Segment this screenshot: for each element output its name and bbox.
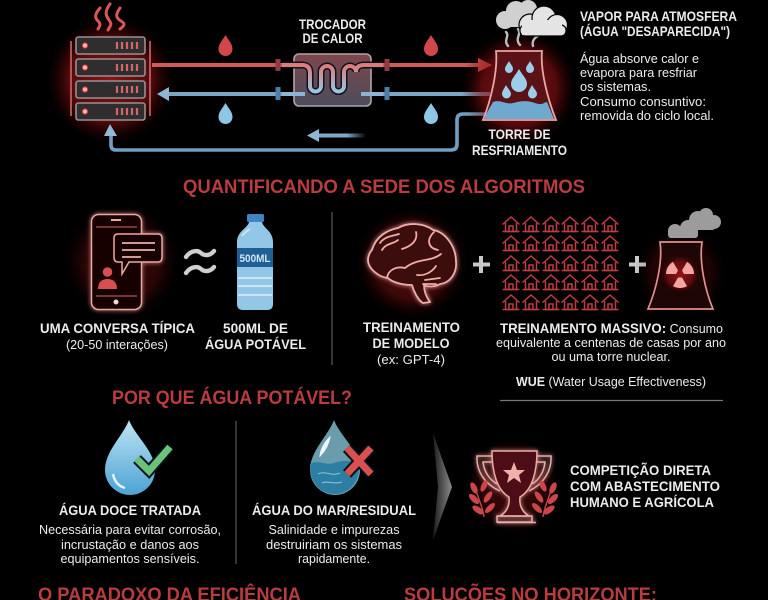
icon: red water drops [218, 35, 438, 56]
plus [473, 256, 490, 273]
label: sea water: ÁGUA DO MAR/RESIDUAL [252, 502, 416, 518]
arrow: chevron [433, 433, 452, 540]
panel: one conversation [40, 204, 306, 352]
text block: vapour to atmosphere: Água absorve calor e [580, 51, 699, 66]
hot water pipe [152, 58, 492, 72]
label: heat exchanger: DE CALOR [302, 30, 362, 46]
text block: sea water: rapidamente. [298, 551, 370, 566]
text block: treated water: incrustação e danos aos [61, 537, 199, 552]
text block: competition [570, 461, 720, 510]
icon: drop with check [105, 420, 170, 495]
label: cooling tower [472, 126, 567, 158]
icon: cooling tower [461, 30, 577, 146]
text block: treated water: equipamentos sensíveis. [60, 551, 200, 566]
panel: treated fresh water [39, 420, 221, 566]
panel: direct competition [465, 438, 720, 534]
text block: massive training [496, 320, 726, 364]
label: typical conversation: (20-50 interações) [66, 337, 168, 352]
panel: sea water [252, 420, 416, 566]
heading: why potable water: POR QUE ÁGUA POTÁVEL? [112, 386, 352, 409]
approx symbol [186, 251, 214, 273]
icon: water bottle: 500ML [240, 253, 271, 265]
text block: competition: COM ABASTECIMENTO [570, 478, 720, 494]
text block: massive training: TREINAMENTO MASSIVO: Consumo [500, 320, 723, 336]
label: 500 ml: ÁGUA POTÁVEL [205, 336, 306, 352]
icon: houses grid [502, 217, 618, 310]
text block: vapour to atmosphere: evapora para resfriar [580, 65, 698, 80]
icon: vapour clouds [496, 0, 568, 46]
label: treated water: ÁGUA DOCE TRATADA [59, 502, 201, 518]
text block: vapour to atmosphere: (ÁGUA "DESAPARECIDA") [580, 23, 730, 39]
icon: nuclear tower [635, 208, 727, 318]
text block: treated water: Necessária para evitar corrosão, [39, 522, 221, 537]
text block: sea water [266, 522, 402, 566]
text block: vapour to atmosphere: removida do ciclo local. [580, 108, 714, 123]
icon: phone with chat [64, 204, 180, 320]
label: 500 ml: 500ML DE [223, 320, 288, 336]
icon: blue water drops [218, 103, 438, 124]
heading: quantifying: QUANTIFICANDO A SEDE DOS ALGORITMOS [183, 176, 585, 198]
panel: model training [356, 207, 727, 400]
text block: massive training: equivalente a centenas de casas por ano [496, 335, 726, 350]
plus [629, 256, 646, 273]
heat exchanger [282, 54, 383, 106]
label: typical conversation: UMA CONVERSA TÍPICA [40, 320, 195, 336]
return pipe [104, 114, 490, 150]
label: model training: (ex: GPT-4) [377, 352, 445, 367]
text block: competition: HUMANO E AGRÍCOLA [570, 494, 714, 510]
text block: vapour to atmosphere: Consumo consuntivo: [580, 94, 706, 109]
panel: cooling cycle diagram [46, 0, 577, 158]
label: heat exchanger [299, 16, 366, 46]
text block: competition: COMPETIÇÃO DIRETA [570, 461, 711, 478]
text block: vapour to atmosphere: VAPOR PARA ATMOSFERA [580, 8, 737, 24]
text block: treated water [39, 522, 221, 566]
icon: drop with cross [310, 420, 371, 495]
label: model training: TREINAMENTO [363, 319, 460, 335]
label: cooling tower: RESFRIAMENTO [472, 142, 567, 158]
label: 500 ml [205, 320, 306, 352]
label: model training: DE MODELO [372, 335, 450, 351]
text: WUE: WUE (Water Usage Effectiveness) [516, 374, 706, 389]
text block: massive training: ou uma torre nuclear. [552, 349, 670, 364]
text block: vapour to atmosphere [580, 8, 737, 123]
text block: sea water: destruiriam os sistemas [266, 537, 402, 552]
label: typical conversation [40, 320, 195, 352]
text block: vapour to atmosphere: os sistemas. [580, 79, 651, 94]
text block: sea water: Salinidade e impurezas [268, 522, 400, 537]
icon: trophy [465, 438, 561, 534]
label: model training [363, 319, 460, 367]
icon: heated server rack [46, 4, 174, 144]
icon: water bottle [237, 214, 273, 310]
label: heat exchanger: TROCADOR [299, 16, 366, 32]
flow arrow [307, 129, 366, 142]
icon: brain [356, 207, 468, 319]
cold water pipe [157, 87, 490, 101]
label: cooling tower: TORRE DE [488, 126, 550, 142]
